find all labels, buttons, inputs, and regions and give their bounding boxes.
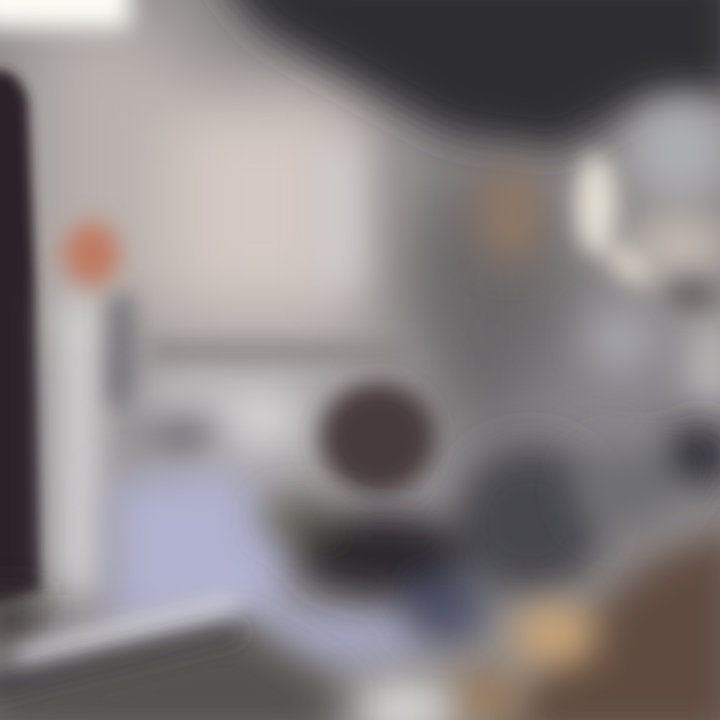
right side bright highlight bbox=[576, 155, 718, 309]
dark shoulders bbox=[262, 445, 605, 642]
brown foreground shape bbox=[490, 525, 720, 720]
lavender garment bbox=[110, 470, 435, 663]
amber glow bbox=[445, 605, 597, 720]
wall: warm light area bbox=[30, 10, 720, 510]
pale table surface bbox=[143, 385, 300, 450]
dark sleeve edge bbox=[110, 295, 132, 405]
horizontal table band bbox=[150, 345, 410, 361]
dark head bbox=[320, 382, 436, 494]
dark bottom-left counter bbox=[0, 595, 345, 720]
right side white blobs bbox=[586, 100, 720, 415]
dark ceiling area bbox=[205, 0, 720, 150]
right grey mass bbox=[575, 423, 720, 530]
warm tan patch bbox=[476, 167, 544, 263]
dark counter edge bbox=[0, 625, 245, 698]
white streak on counter bbox=[15, 595, 240, 668]
pale vertical light streak bbox=[325, 140, 357, 290]
dark side pillar bbox=[0, 70, 42, 610]
orange hand bbox=[64, 222, 120, 286]
bright window glow bbox=[0, 0, 130, 28]
white raised arm bbox=[58, 295, 100, 595]
pale foreground patch bbox=[355, 682, 455, 720]
